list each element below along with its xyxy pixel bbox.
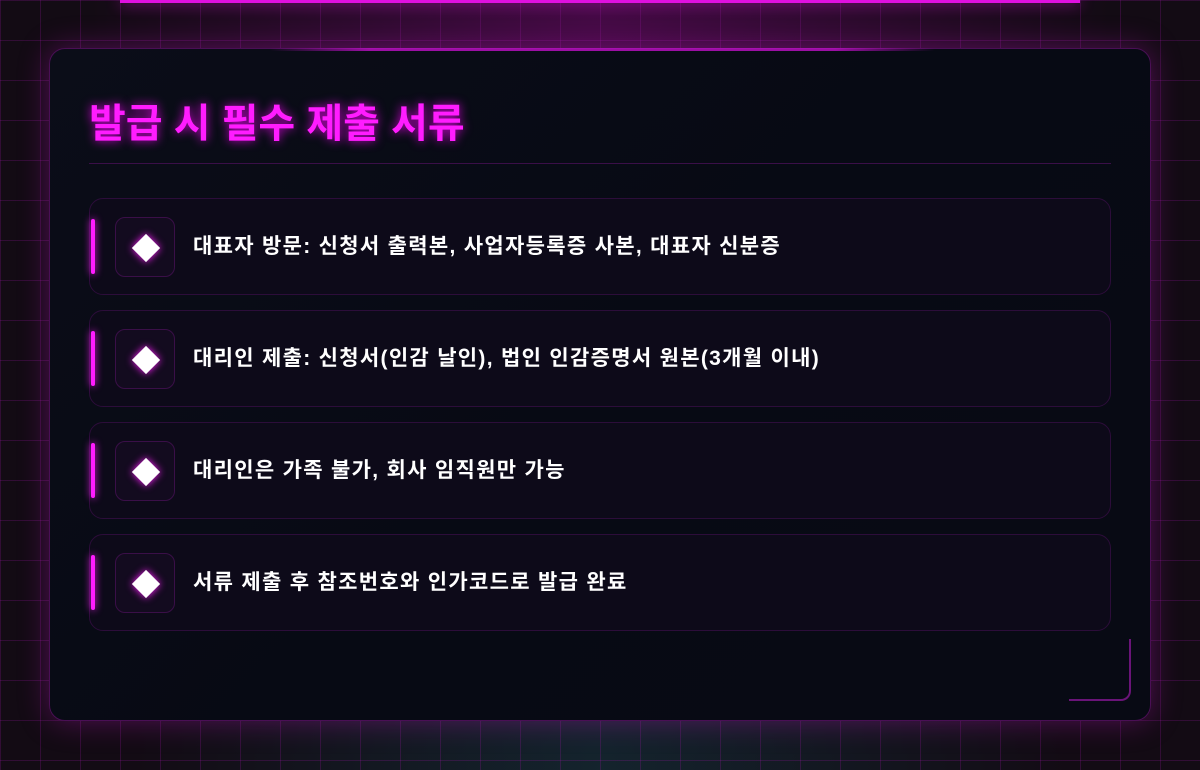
icon: diamond <box>115 329 175 389</box>
text 4: 서류 제출 후 참조번호와 인가코드로 발급 완료 <box>193 571 628 594</box>
corner bracket <box>1069 639 1131 701</box>
title: 발급 시 필수 제출 서류 <box>89 102 465 146</box>
icon: diamond <box>115 553 175 613</box>
item 4 <box>89 534 1111 631</box>
icon: diamond <box>115 441 175 501</box>
icon: diamond <box>115 217 175 277</box>
item 3 <box>89 422 1111 519</box>
item 1 <box>89 198 1111 295</box>
text 1: 대표자 방문: 신청서 출력본, 사업자등록증 사본, 대표자 신분증 <box>193 235 781 258</box>
text 2: 대리인 제출: 신청서(인감 날인), 법인 인감증명서 원본(3개월 이내) <box>193 347 820 370</box>
text 3: 대리인은 가족 불가, 회사 임직원만 가능 <box>193 459 566 482</box>
item 2 <box>89 310 1111 407</box>
